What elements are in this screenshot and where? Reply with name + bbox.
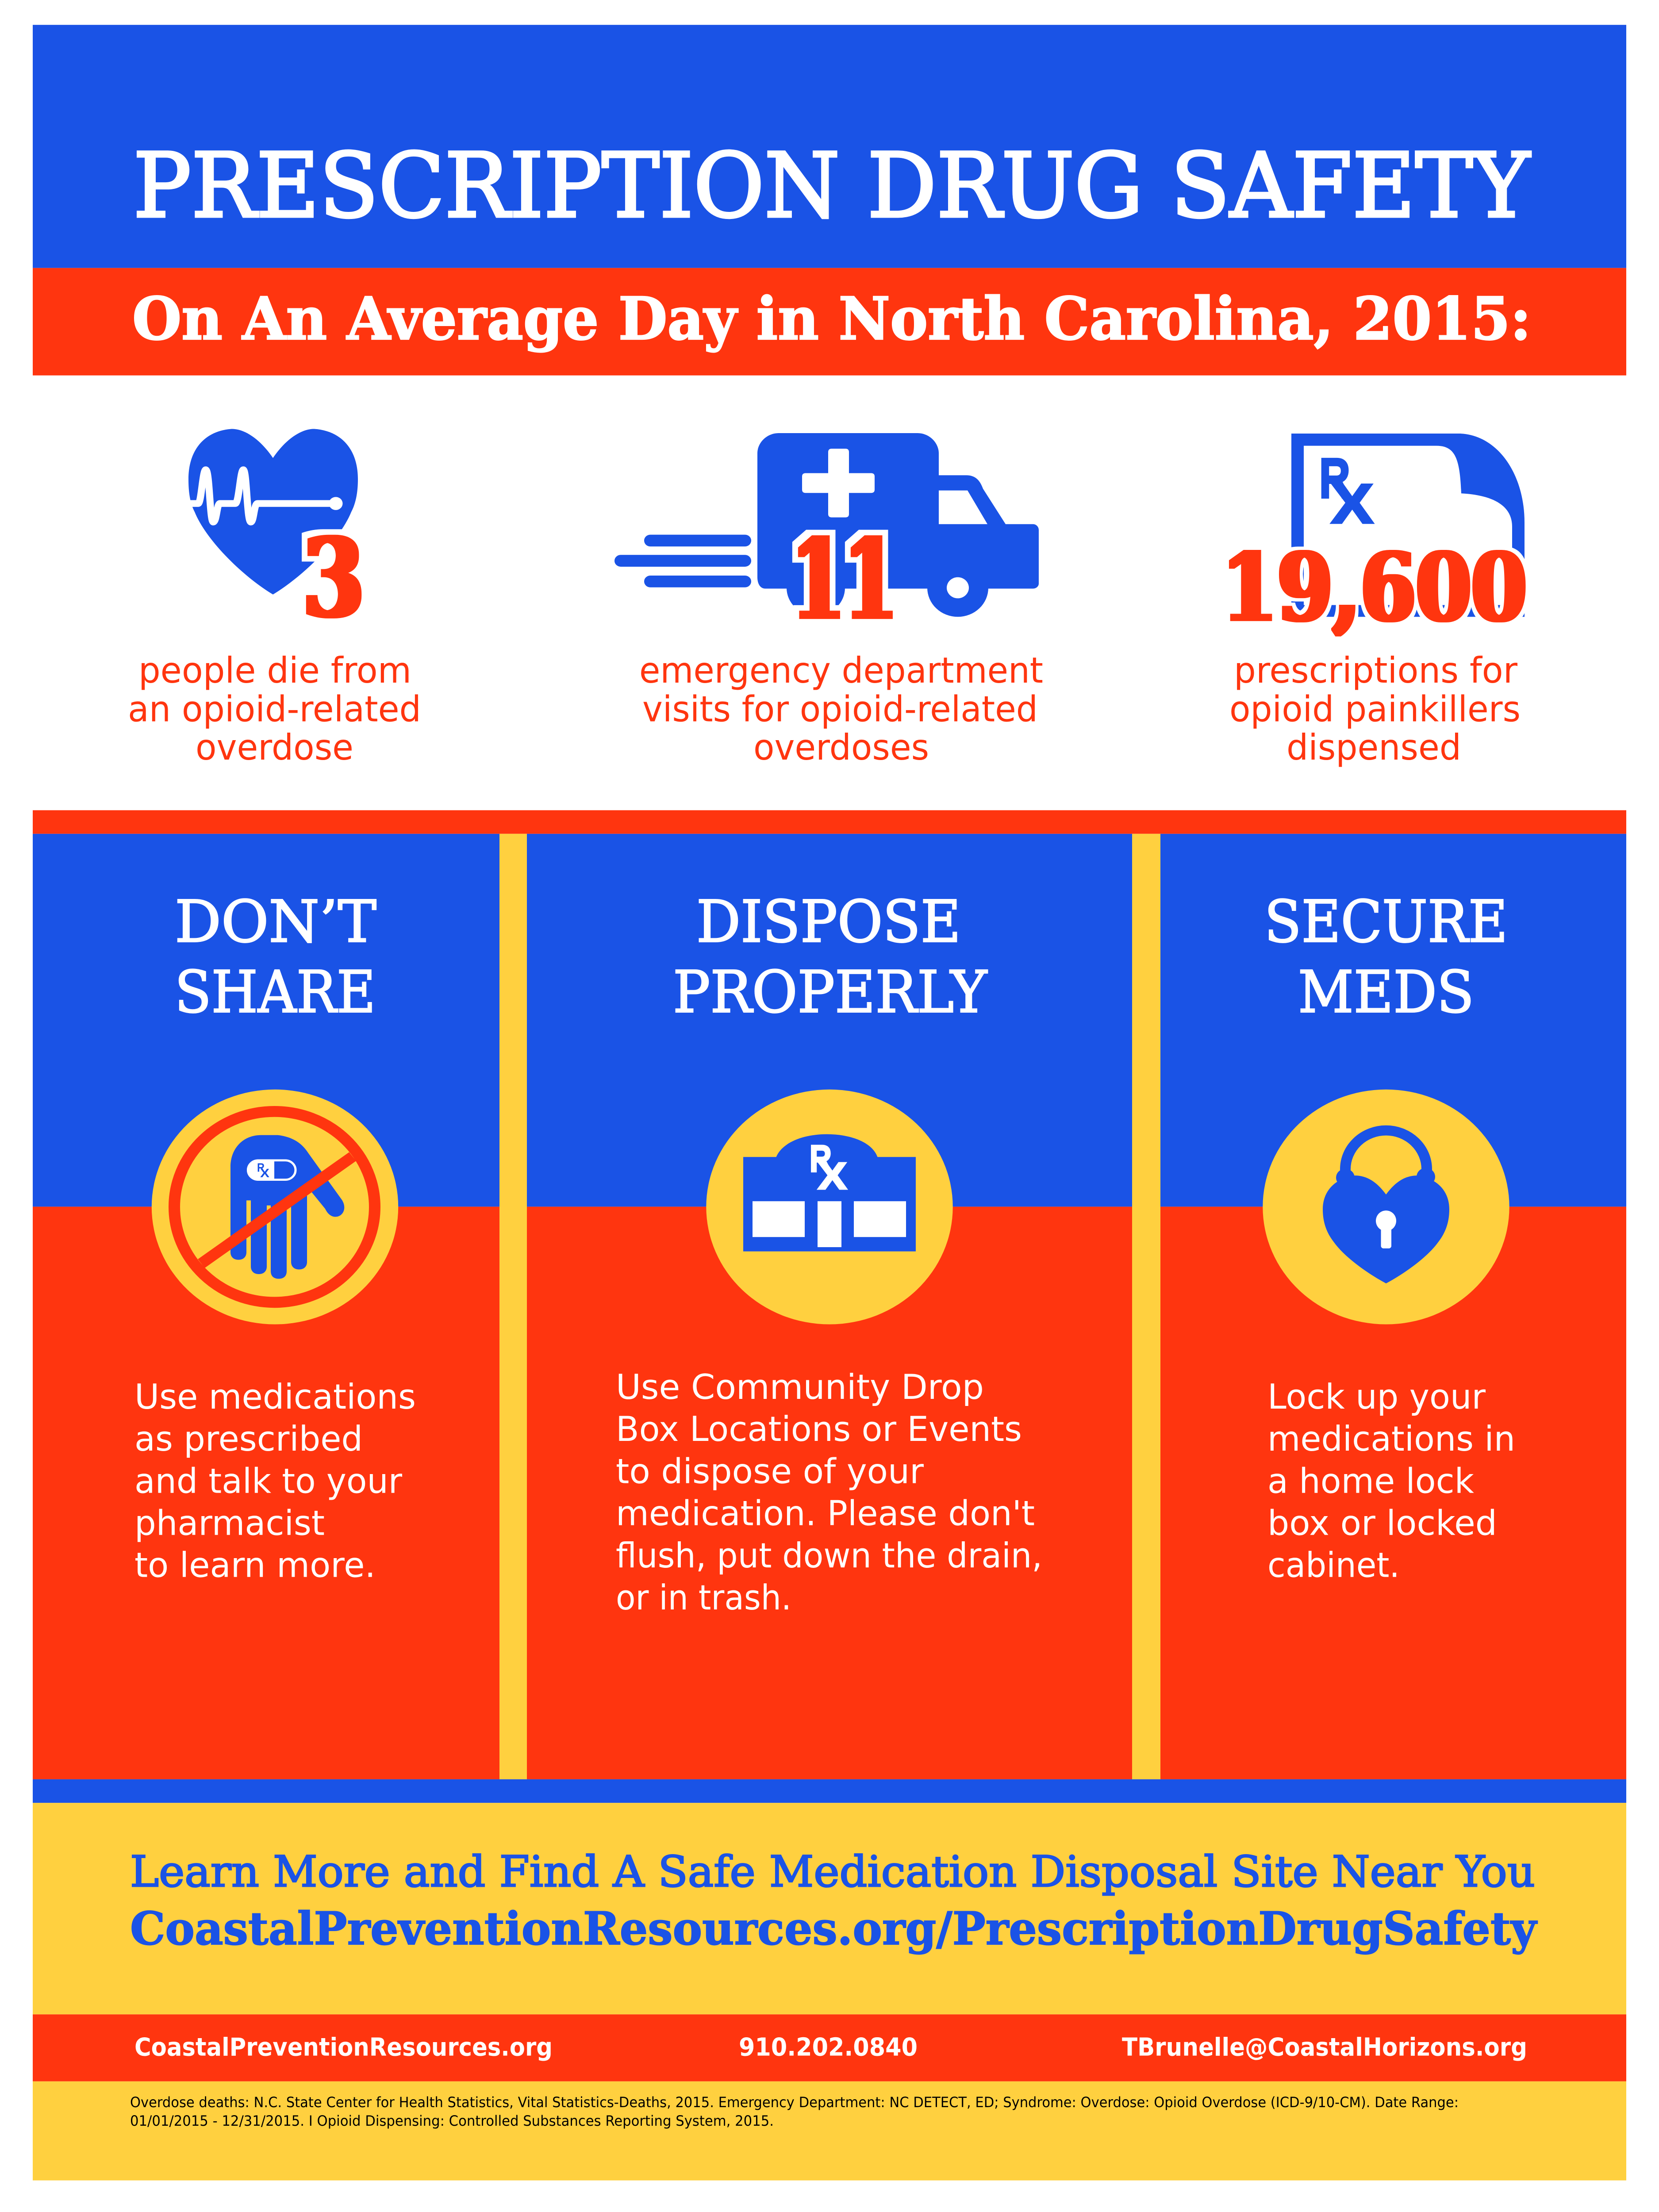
stat caption: dispensed (1286, 727, 1461, 768)
stat caption: prescriptions for (1234, 650, 1517, 691)
body text: Box Locations or Events (616, 1409, 1022, 1449)
heading: don't share: SHARE (175, 959, 376, 1026)
number: 11: 11 (792, 515, 897, 645)
body text: Use medications (134, 1377, 416, 1417)
stat: emergency visits (614, 433, 1043, 768)
body text: box or locked (1267, 1503, 1497, 1543)
icon: ambulance (614, 433, 1039, 617)
number: 19,600: 19,600 (1222, 533, 1527, 643)
sources footer: 01/01/2015 - 12/31/2015. I Opioid Dispensing: Controlled Substances Reporting System, 2015. (130, 2112, 774, 2129)
contact bar (33, 2014, 1626, 2081)
Rx symbol: X (1331, 473, 1373, 535)
body text: as prescribed (134, 1419, 363, 1459)
heading: dispose properly: PROPERLY (673, 959, 988, 1026)
number: 3: 3 (303, 515, 364, 642)
panel: dispose properly (527, 834, 1132, 1779)
subtitle band (33, 268, 1626, 376)
heading: don't share (175, 888, 376, 1026)
heading: dispose properly: DISPOSE (696, 888, 961, 956)
call to action text: Learn More and Find A Safe Medication Disposal Site Near You (130, 1847, 1535, 1897)
stat: overdose deaths (128, 429, 421, 768)
body text (1267, 1377, 1515, 1585)
heading: dispose properly (673, 888, 988, 1026)
body text (134, 1377, 416, 1585)
body text: cabinet. (1267, 1546, 1400, 1585)
call to action panel (33, 1803, 1626, 2014)
body text: and talk to your (134, 1461, 402, 1501)
contact bar: 910.202.0840 (739, 2033, 918, 2062)
body text: flush, put down the drain, (616, 1536, 1042, 1575)
icon: pharmacy building: X (818, 1155, 847, 1197)
icon: heart with heartbeat (188, 429, 358, 595)
Rx symbol: R (1319, 447, 1350, 510)
website link: CoastalPreventionResources.org/PrescriptionDrugSafety (130, 1902, 1538, 1955)
icon: hand with no symbol (152, 1090, 398, 1325)
sources footer: Overdose deaths: N.C. State Center for Health Statistics, Vital Statistics-Deaths, 2015. Emergency Department: NC DETECT, ED; Syndrome: Overdose: Opioid Overdose (ICD-9/10-CM). Date Range: (130, 2094, 1459, 2111)
stat caption: opioid painkillers (1229, 689, 1521, 730)
body text: or in trash. (616, 1578, 791, 1618)
body text: Lock up your (1267, 1377, 1486, 1417)
panel: secure meds (1160, 834, 1626, 1779)
stat caption (1229, 650, 1521, 768)
stat: prescriptions (1222, 434, 1527, 768)
body text: pharmacist (134, 1503, 325, 1543)
heading: secure meds: SECURE (1264, 888, 1508, 956)
body text: a home lock (1267, 1461, 1474, 1501)
stat caption: an opioid-related (128, 689, 421, 730)
icon: pharmacy building (706, 1090, 953, 1325)
body text: to dispose of your (616, 1452, 924, 1491)
subtitle: On An Average Day in North Carolina, 2015: (132, 285, 1531, 353)
heading: secure meds (1264, 888, 1508, 1026)
stat caption: overdoses (753, 727, 929, 768)
title: PRESCRIPTION DRUG SAFETY (133, 134, 1531, 238)
heading: don't share: DON’T (175, 888, 376, 956)
icon: prescription document (1291, 434, 1525, 617)
body text (616, 1367, 1042, 1618)
icon: pill: R (257, 1160, 265, 1174)
stat caption: overdose (196, 727, 353, 768)
sources footer (33, 2081, 1626, 2181)
body text: Use Community Drop (616, 1367, 984, 1407)
stat caption (639, 650, 1043, 768)
stat caption (128, 650, 421, 768)
body text: to learn more. (134, 1546, 376, 1585)
icon: heart padlock (1263, 1090, 1509, 1325)
header band (33, 25, 1626, 268)
stat caption: people die from (138, 650, 411, 691)
stat caption: visits for opioid-related (642, 689, 1038, 730)
Rx symbol (1319, 447, 1373, 535)
icon: pharmacy building: R (810, 1137, 832, 1180)
body text: medications in (1267, 1419, 1515, 1459)
body text: medication. Please don't (616, 1494, 1035, 1533)
heading: secure meds: MEDS (1298, 959, 1474, 1026)
stat caption: emergency department (639, 650, 1043, 691)
icon: pill: X (260, 1166, 269, 1180)
panel: don't share (33, 834, 499, 1779)
contact bar: CoastalPreventionResources.org (134, 2033, 553, 2062)
contact bar: TBrunelle@CoastalHorizons.org (1122, 2033, 1527, 2062)
icon: pill (247, 1160, 296, 1181)
